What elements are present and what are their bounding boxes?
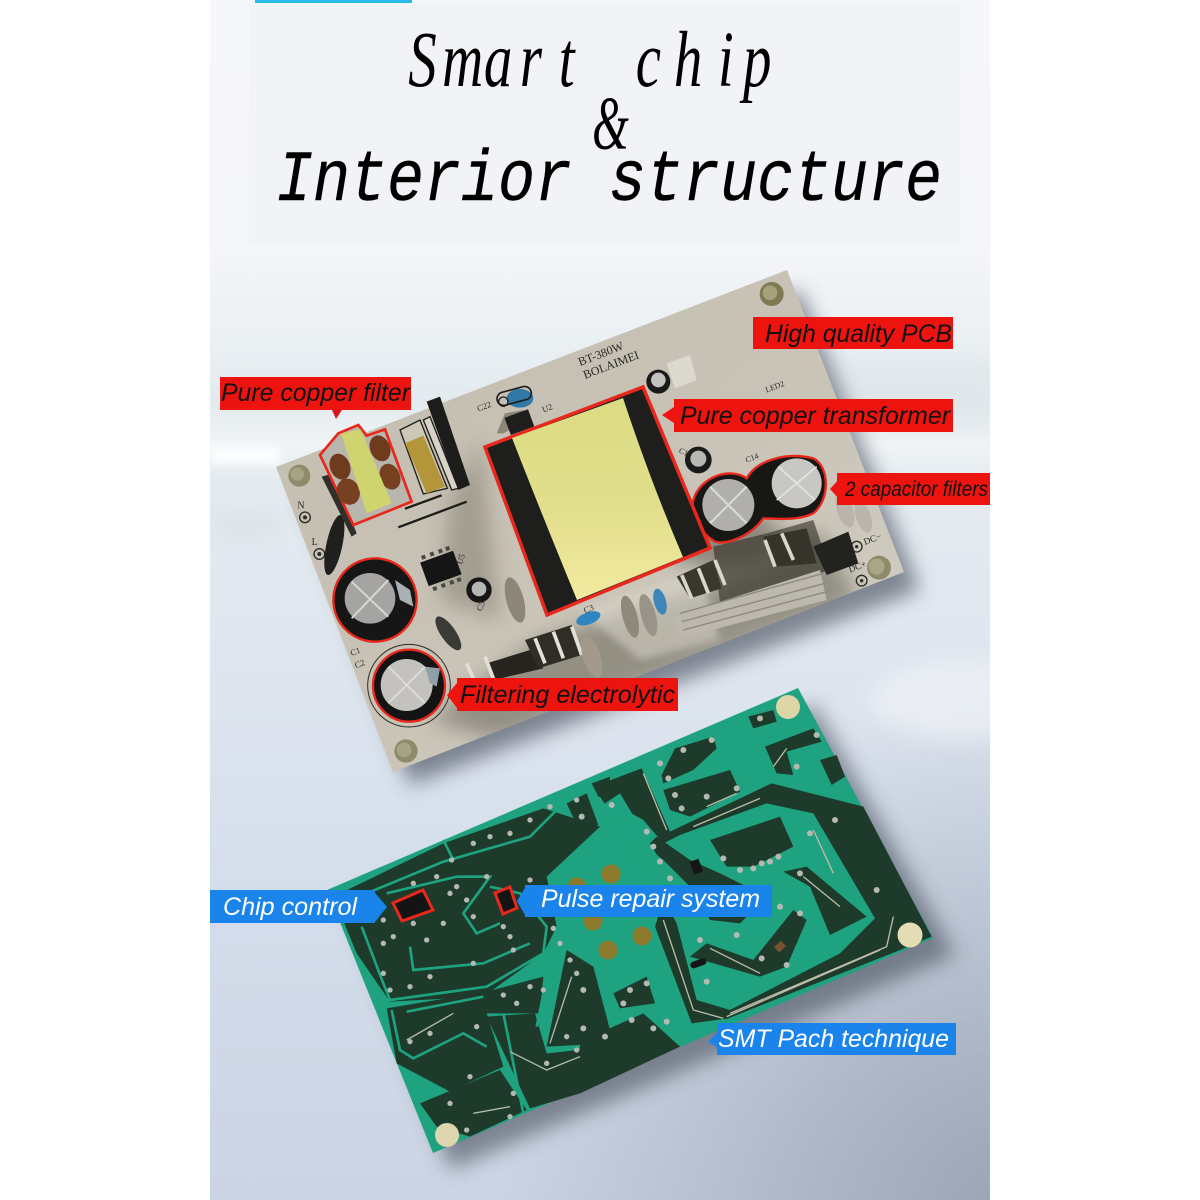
black bar [427,397,470,490]
cyan strip at top [255,0,412,3]
board holes [435,695,922,1147]
top circuit board photo [276,270,920,785]
red chip markers [393,887,517,921]
left part of board components: C22 [475,399,493,414]
board model text: BOLAIMEI [581,348,641,382]
pure copper transformer [485,387,710,615]
right part of board components [617,282,891,639]
title: & [592,82,629,166]
right side copper traces [580,707,932,1093]
board model text: BT-380W [576,338,626,369]
background panel [210,0,1050,1200]
title panel [249,3,960,245]
callout: pure copper filter [220,377,412,419]
left part of board components: N [297,500,305,511]
callout: SMT Pach technique: SMT Pach technique [718,1025,949,1053]
filter coil [320,425,412,525]
title: Smart chip [408,16,771,103]
left part of board components: C3 [582,602,595,615]
callout: high quality PCB: High quality PCB [765,320,952,348]
twin capacitor filters [693,456,826,542]
capacitor two [368,644,450,727]
title [276,16,942,222]
right part of board components: C14 [744,451,760,465]
left part of board components: C1 [349,645,362,658]
right part of board components: DC− [862,532,883,548]
callout: 2 capacitor filters: 2 capacitor filters [844,478,988,501]
IC and small parts [418,545,464,592]
callout: pure copper transformer: Pure copper transformer [680,402,952,430]
callout: chip control [210,890,387,923]
green circuit board photo [327,688,955,1170]
left part of board components: C2 [353,657,366,670]
blue capacitor and base [497,410,527,433]
left part of board components [288,385,607,763]
capacitor one [333,558,417,642]
heat sinks and solder strip [713,520,830,603]
callout: 2 capacitor filters [830,473,990,505]
callout: filtering electrolytic: Filtering electrolytic [460,681,676,709]
right part of board components: C16 [678,446,693,459]
right part of board components: LED2 [764,379,786,395]
callout: chip control: Chip control [223,893,358,921]
left part of board components: U2 [540,401,554,415]
right part of board components: DC+ [847,560,868,575]
left part of board components: L [312,537,318,548]
callout: pulse repair system: Pulse repair system [541,885,760,913]
left part of board components: C5 [474,599,487,612]
callout: pure copper filter: Pure copper filter [221,379,412,407]
left side copper traces [333,777,610,1137]
left part of board components: U5 [454,552,467,566]
title: Interior structure [276,140,942,222]
yellow capacitor [400,420,447,494]
